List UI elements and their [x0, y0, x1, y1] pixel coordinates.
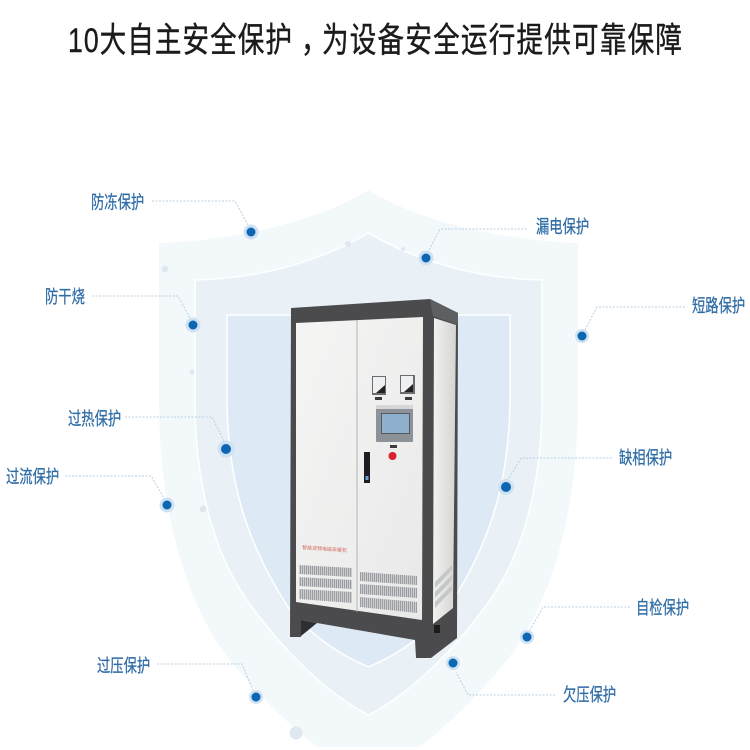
- shield: outer layer: [159, 190, 578, 750]
- cabinet: left gauge: [372, 376, 386, 400]
- callout: 漏电保护: [418, 217, 589, 266]
- callout: 过流保护: 过流保护: [6, 467, 59, 488]
- cabinet: red button: [388, 452, 396, 460]
- cabinet: [290, 299, 458, 658]
- callout: 过压保护: [97, 656, 263, 704]
- callout: 过流保护: [6, 467, 174, 512]
- title: 为设备安全运行提供可靠保障: [322, 21, 682, 60]
- callout: 自检保护: 自检保护: [636, 598, 689, 619]
- callout: 短路保护: 短路保护: [692, 296, 745, 317]
- decorative pale dots: [162, 241, 405, 740]
- callout: 防冻保护: 防冻保护: [91, 193, 144, 213]
- shield background: [0, 190, 750, 750]
- shield: middle layer: [195, 233, 542, 715]
- callout: 防冻保护: [91, 193, 258, 240]
- cabinet: top side shade: [430, 299, 458, 325]
- cabinet: side socket: [434, 625, 440, 633]
- callout: 缺相保护: 缺相保护: [619, 448, 672, 469]
- title: 10大自主安全保护: [68, 21, 292, 60]
- callout: 自检保护: [520, 598, 689, 644]
- callout: 缺相保护: [498, 448, 672, 495]
- shield: inner layer: [227, 315, 510, 667]
- callout: 防干烧: [45, 287, 200, 332]
- cabinet: white front doors: [296, 317, 423, 620]
- cabinet: red product label: 智能变频电磁采暖机: [302, 544, 347, 554]
- cabinet: right door vents: [360, 572, 417, 613]
- cabinet: side vents: [435, 565, 452, 608]
- callout: 欠压保护: [446, 656, 616, 706]
- callout: 过热保护: [68, 409, 234, 458]
- cabinet: button label: [390, 445, 397, 448]
- cabinet: side panel: [433, 318, 456, 624]
- callout: 欠压保护: 欠压保护: [563, 685, 616, 706]
- cabinet: door seam: [356, 320, 358, 612]
- cabinet: right gauge: [400, 375, 415, 400]
- cabinet: foot opening: [301, 620, 317, 636]
- callout: 漏电保护: 漏电保护: [536, 217, 589, 238]
- callout: 过压保护: 过压保护: [97, 656, 150, 677]
- title: [68, 21, 682, 60]
- callout: 防干烧: 防干烧: [45, 287, 85, 308]
- cabinet: touch screen: [376, 405, 413, 442]
- cabinet: door handle: [364, 452, 370, 483]
- title: ，: [301, 21, 328, 60]
- bottom fade-out clip: [0, 747, 750, 750]
- callout: 过热保护: 过热保护: [68, 409, 121, 430]
- cabinet: dark frame: [290, 299, 458, 658]
- cabinet: left door vents: [299, 565, 352, 603]
- callout: 短路保护: [575, 296, 745, 343]
